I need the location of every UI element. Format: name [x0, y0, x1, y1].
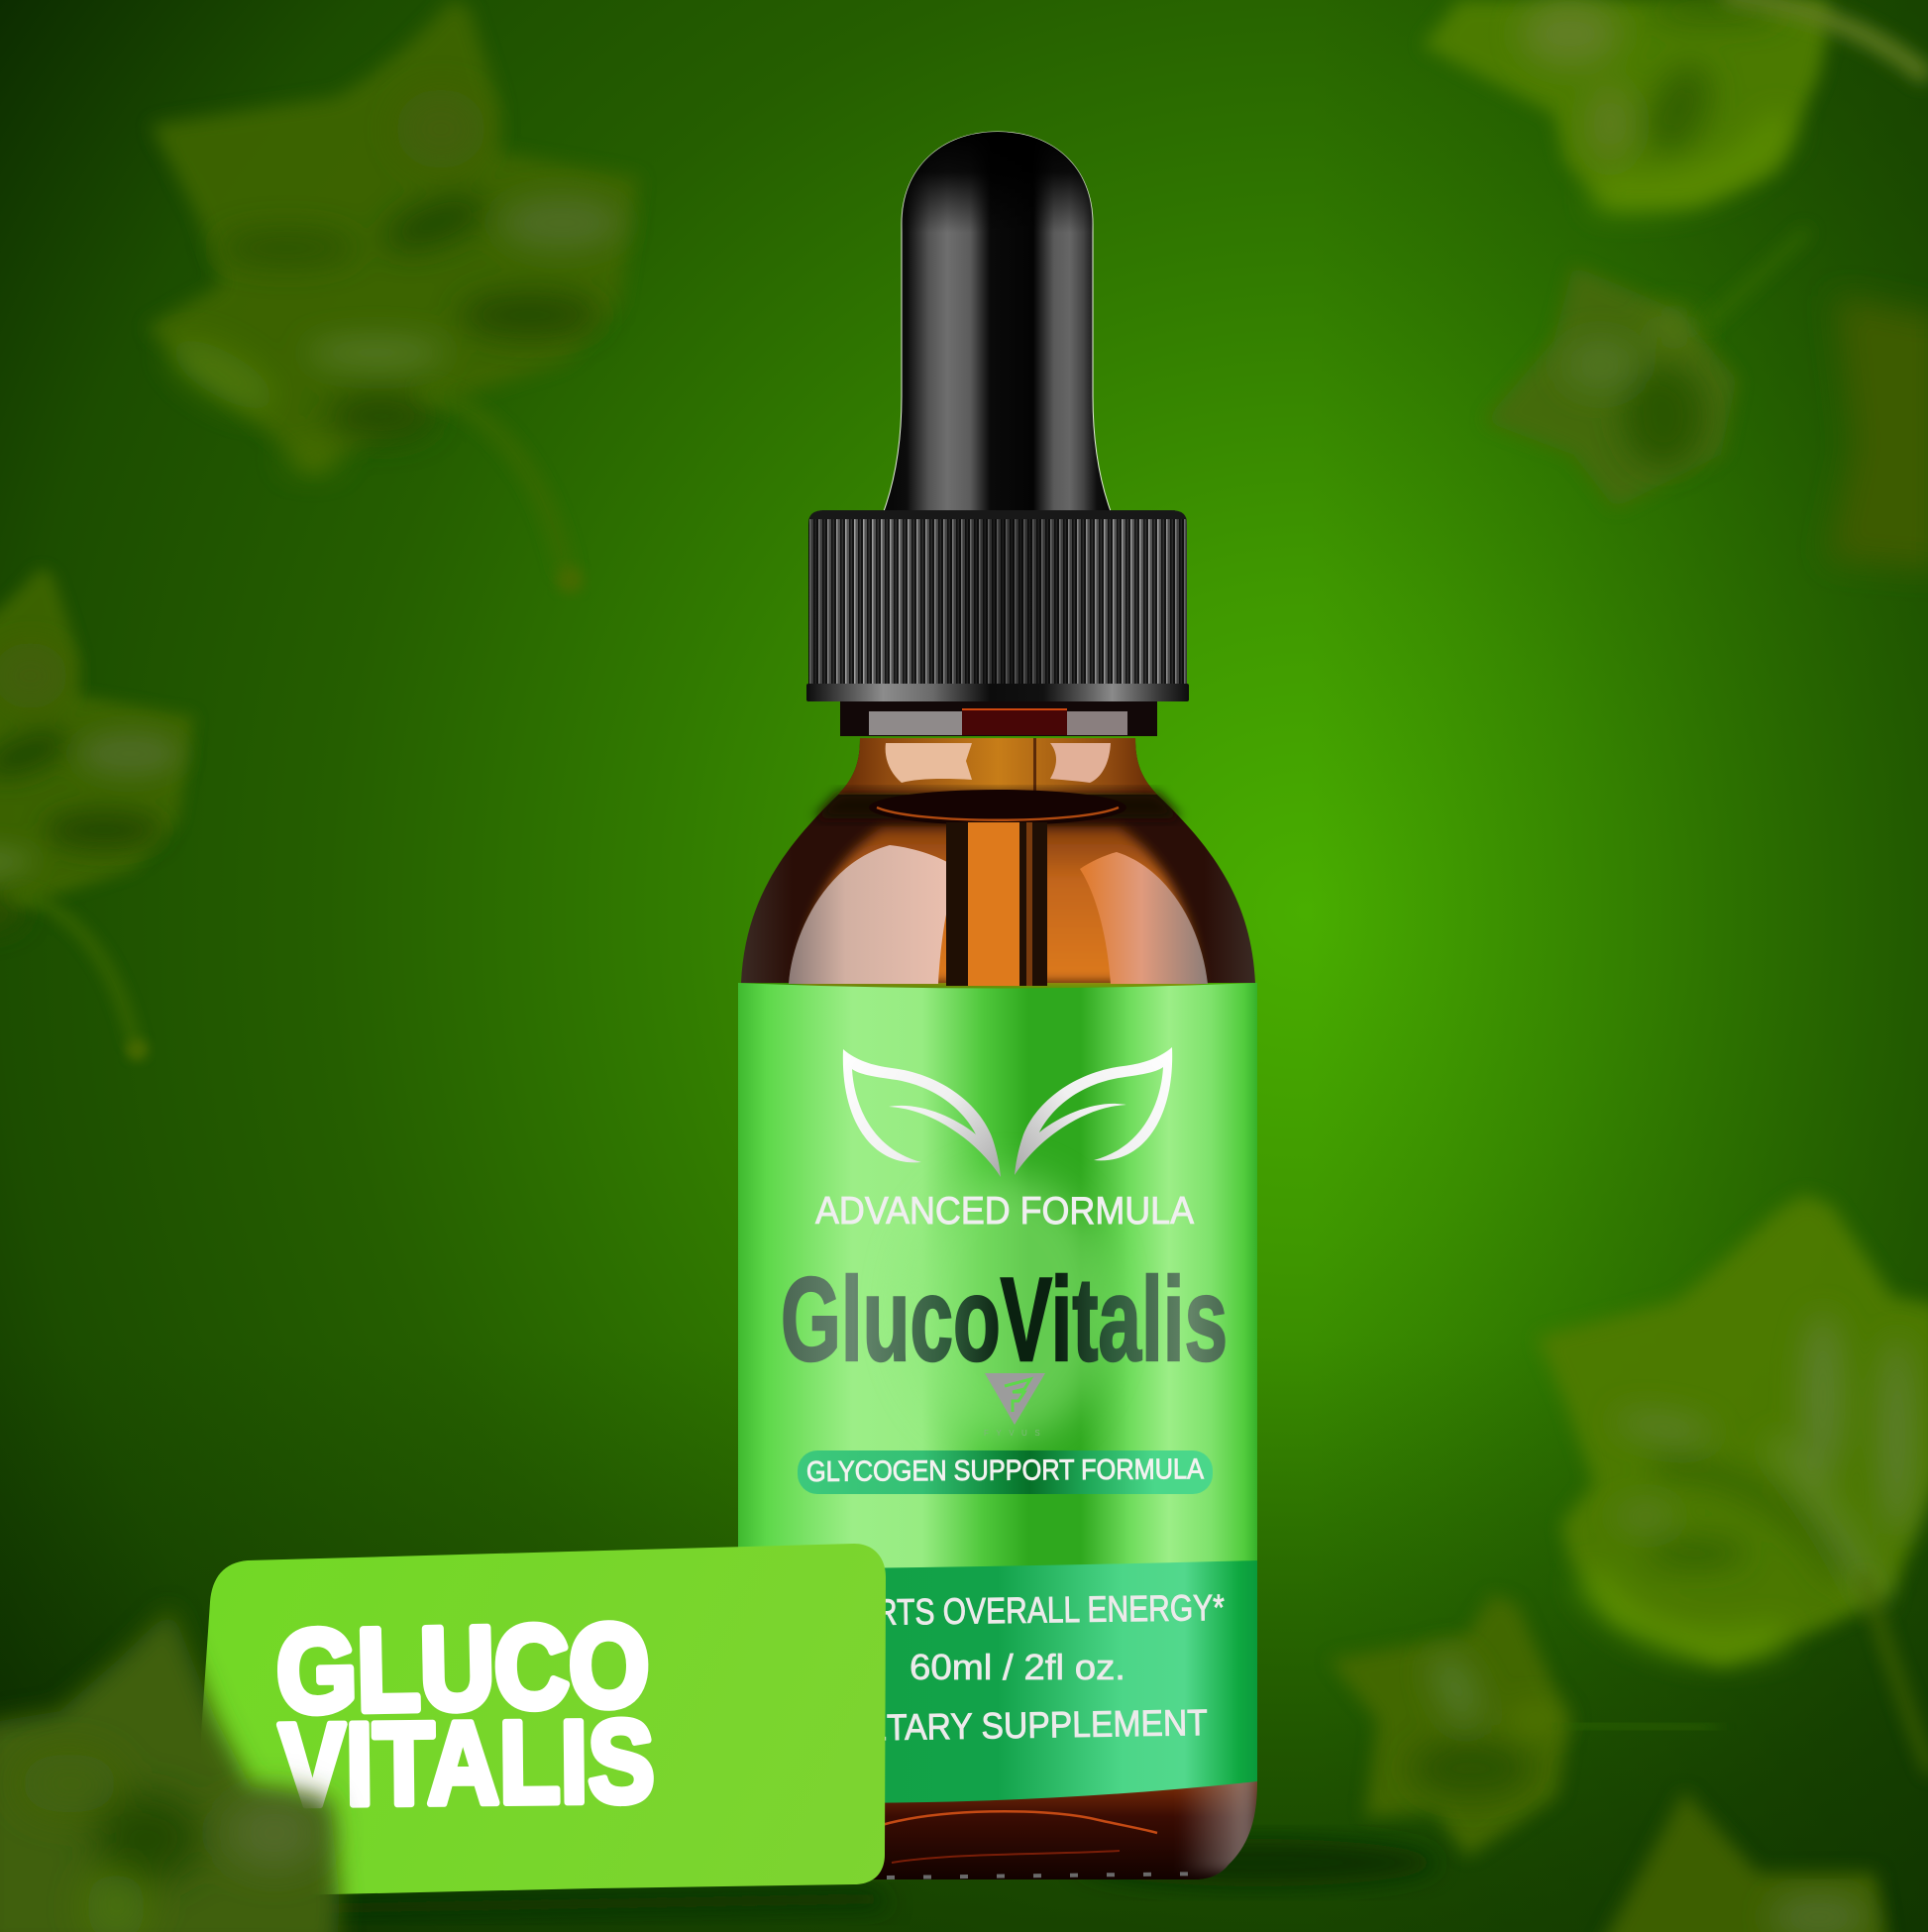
amber glass body	[741, 738, 1255, 986]
fyvus logo	[984, 1373, 1047, 1438]
ribbed cap	[806, 510, 1189, 701]
blurred leaf: lower middle right	[1329, 1594, 1719, 1857]
foreground blurred leaf	[0, 1608, 340, 1932]
band text: supplement: DIETARY SUPPLEMENT	[831, 1702, 1208, 1749]
blurred leaf: bottom right	[1598, 1791, 1888, 1932]
glass base	[873, 1781, 1257, 1879]
dropper bulb	[884, 132, 1111, 511]
label centre light	[902, 1174, 1110, 1442]
bottle label	[738, 983, 1257, 1803]
leaf logo	[843, 1047, 1172, 1177]
neck collar	[840, 701, 1157, 736]
bottle shadow on floor	[1080, 1839, 1437, 1886]
blurred leaf: right edge	[1827, 295, 1928, 570]
blurred leaf: top right	[1423, 0, 1928, 205]
band text: energy: SUPPORTS OVERALL ENERGY*	[772, 1587, 1225, 1634]
product name: GlucoVitalis	[781, 1253, 1228, 1386]
card title: gluco: GLUCO	[275, 1600, 650, 1738]
advanced formula text: ADVANCED FORMULA	[815, 1190, 1194, 1233]
green name card	[198, 1544, 886, 1895]
label band	[738, 1560, 1257, 1803]
blurred leaf: left edge	[0, 569, 194, 1061]
card title: vitalis: VITALIS	[278, 1696, 655, 1831]
blurred leaf: top left	[146, 0, 639, 593]
formula pill: GLYCOGEN SUPPORT FORMULA	[806, 1453, 1205, 1488]
label background	[738, 983, 1257, 1585]
blurred leaf: upper right	[1484, 230, 1808, 508]
card shadow	[297, 1890, 892, 1917]
product bottle	[738, 132, 1258, 1879]
fyvus logo: FYVUS	[984, 1429, 1047, 1438]
blurred leaf: lower right large	[1537, 1195, 1928, 1773]
band text: volume: 60ml / 2fl oz.	[910, 1647, 1125, 1687]
